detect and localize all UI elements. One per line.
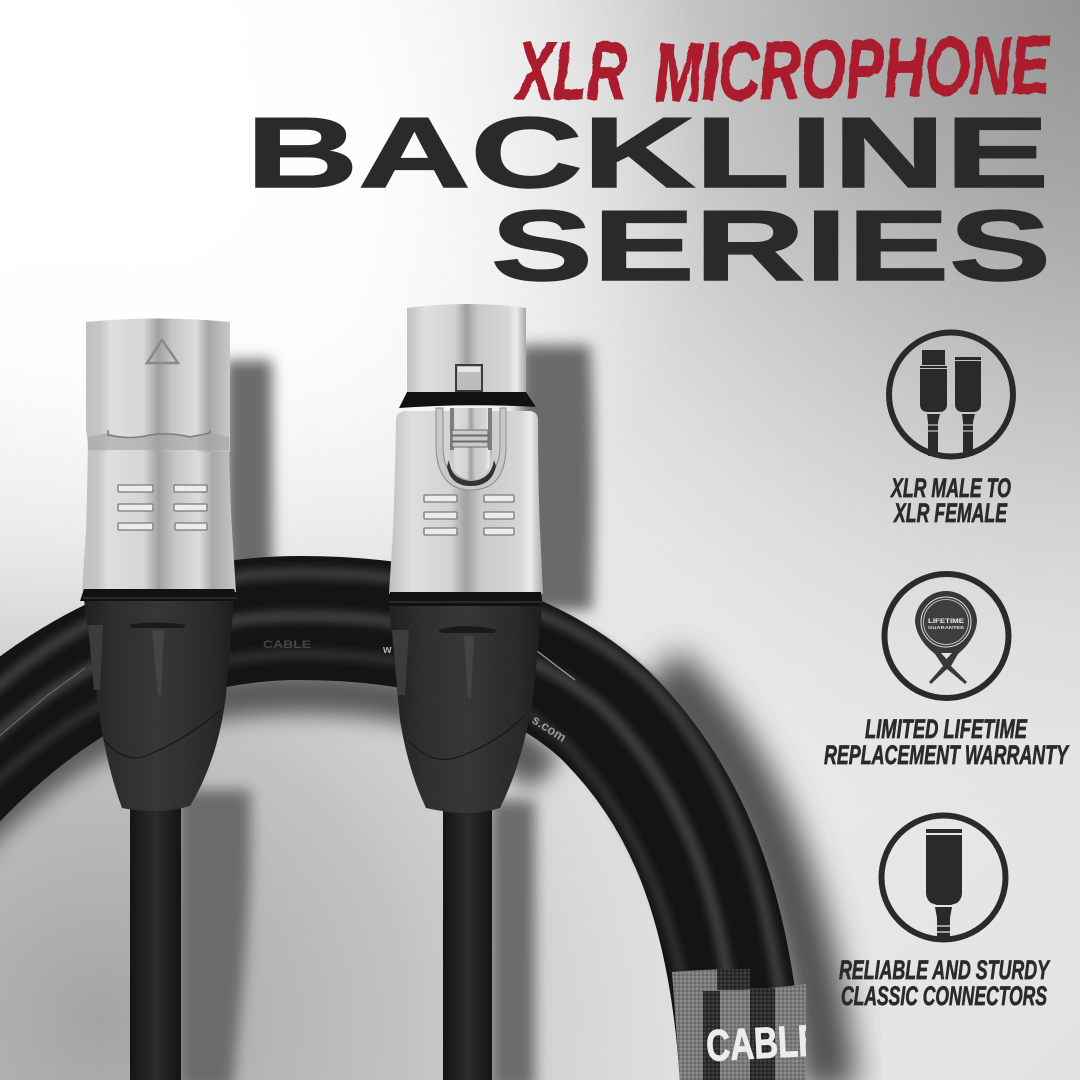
- female boot: [389, 605, 542, 813]
- female black ring: [399, 392, 536, 408]
- strap label: CABLE: [705, 1016, 821, 1071]
- male slots: [118, 485, 207, 530]
- icon: connector: [882, 816, 1006, 941]
- cable base fill: [0, 618, 742, 1080]
- cable strand: outer: [0, 573, 790, 1080]
- printed cable text: CABLE: [263, 639, 311, 651]
- drop shadows: [0, 345, 830, 1080]
- caption: reliable and sturdy classic connectors: [839, 955, 1051, 1011]
- printed cable text: s.com: [529, 712, 569, 745]
- female lower shell: [389, 411, 543, 594]
- icon: lifetime guarantee tag: [884, 574, 1008, 698]
- cable highlight line: [537, 651, 575, 680]
- female latch window: [456, 365, 482, 391]
- male XLR connector: [80, 318, 238, 1080]
- female cable: [443, 805, 492, 1080]
- male black ring: [80, 589, 238, 601]
- cable strand: middle: [0, 616, 739, 1080]
- icon: male and female cable ends: [889, 332, 1013, 456]
- male boot: [84, 600, 234, 811]
- title: XLR Microphone: XLR: [514, 26, 627, 117]
- male barrel: [86, 318, 230, 452]
- female black ring lower: [388, 592, 543, 606]
- cable coil: [0, 573, 790, 1080]
- male triangle mark: [147, 340, 178, 363]
- title: Series: SERIES: [491, 190, 1051, 302]
- caption: XLR male to XLR female: XLR MALE TO: [890, 473, 1011, 503]
- caption: XLR male to XLR female: XLR FEMALE: [893, 498, 1008, 528]
- female latch button: [436, 408, 506, 490]
- male lower shell: [82, 440, 236, 592]
- female barrel: [407, 304, 526, 400]
- female XLR connector: [388, 304, 543, 1080]
- velcro cable strap: [672, 969, 806, 1080]
- cable strand: inner: [0, 654, 696, 1080]
- title: Backline: BACKLINE: [246, 97, 1049, 209]
- icon: lifetime guarantee tag: LIFETIME: [928, 618, 964, 625]
- female slots: [424, 495, 514, 535]
- printed cable text: [263, 639, 569, 745]
- printed cable text: w: [382, 644, 392, 656]
- caption: XLR male to XLR female: [890, 473, 1011, 528]
- icon: lifetime guarantee tag: GUARANTEE: [928, 625, 965, 631]
- male cable: [130, 805, 181, 1080]
- caption: limited lifetime replacement warranty: [824, 714, 1070, 770]
- female boot T mark: [392, 626, 497, 698]
- title: XLR Microphone: [514, 20, 1052, 119]
- male boot T mark: [88, 622, 186, 695]
